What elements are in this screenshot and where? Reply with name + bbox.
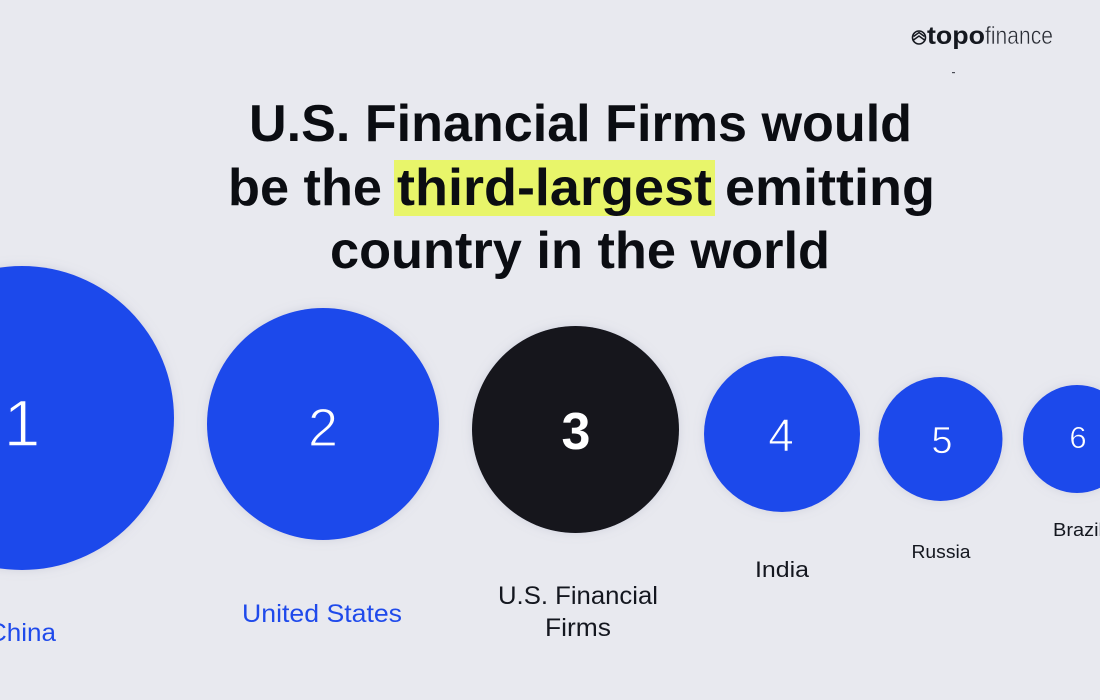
title — [228, 95, 935, 280]
country label: United States — [242, 600, 402, 628]
logo: topofinance — [912, 22, 1053, 50]
rank number: 2 — [308, 398, 338, 458]
bubble 2: United States — [207, 308, 439, 628]
circle — [0, 266, 174, 570]
bubble 6: Brazil — [1023, 385, 1100, 540]
country label: India — [755, 557, 810, 582]
title line 2: emitting — [725, 159, 935, 217]
logo wordmark: topo: topo — [927, 22, 985, 50]
circle — [1023, 385, 1100, 493]
logo wordmark: finance: finance — [985, 22, 1053, 50]
rank number: 5 — [931, 420, 953, 462]
country label: Brazil — [1053, 520, 1100, 540]
circle — [704, 356, 860, 512]
bubble 4: India — [704, 356, 860, 582]
rank number: 1 — [4, 386, 40, 460]
circle — [207, 308, 439, 540]
rank number: 6 — [1069, 420, 1087, 455]
title line 2: third-largest — [397, 159, 712, 217]
rank number: 4 — [768, 409, 794, 461]
circle — [878, 377, 1002, 501]
bubble 3: U.S. Financial Firms — [472, 326, 679, 642]
bubble 5: Russia — [878, 377, 1002, 562]
title line 1: U.S. Financial Firms would — [249, 95, 912, 153]
country label: Russia — [912, 542, 972, 562]
label: Firms — [545, 614, 611, 642]
title line 3: country in the world — [330, 222, 830, 280]
rank number: 3 — [562, 403, 590, 461]
label: U.S. Financial — [498, 582, 658, 610]
title line 2: be the — [228, 159, 382, 217]
icon: logo mark — [912, 31, 926, 44]
circle — [472, 326, 679, 533]
title highlight — [394, 160, 715, 216]
bubble 1: China — [0, 266, 174, 647]
small dash under logo — [952, 72, 955, 73]
